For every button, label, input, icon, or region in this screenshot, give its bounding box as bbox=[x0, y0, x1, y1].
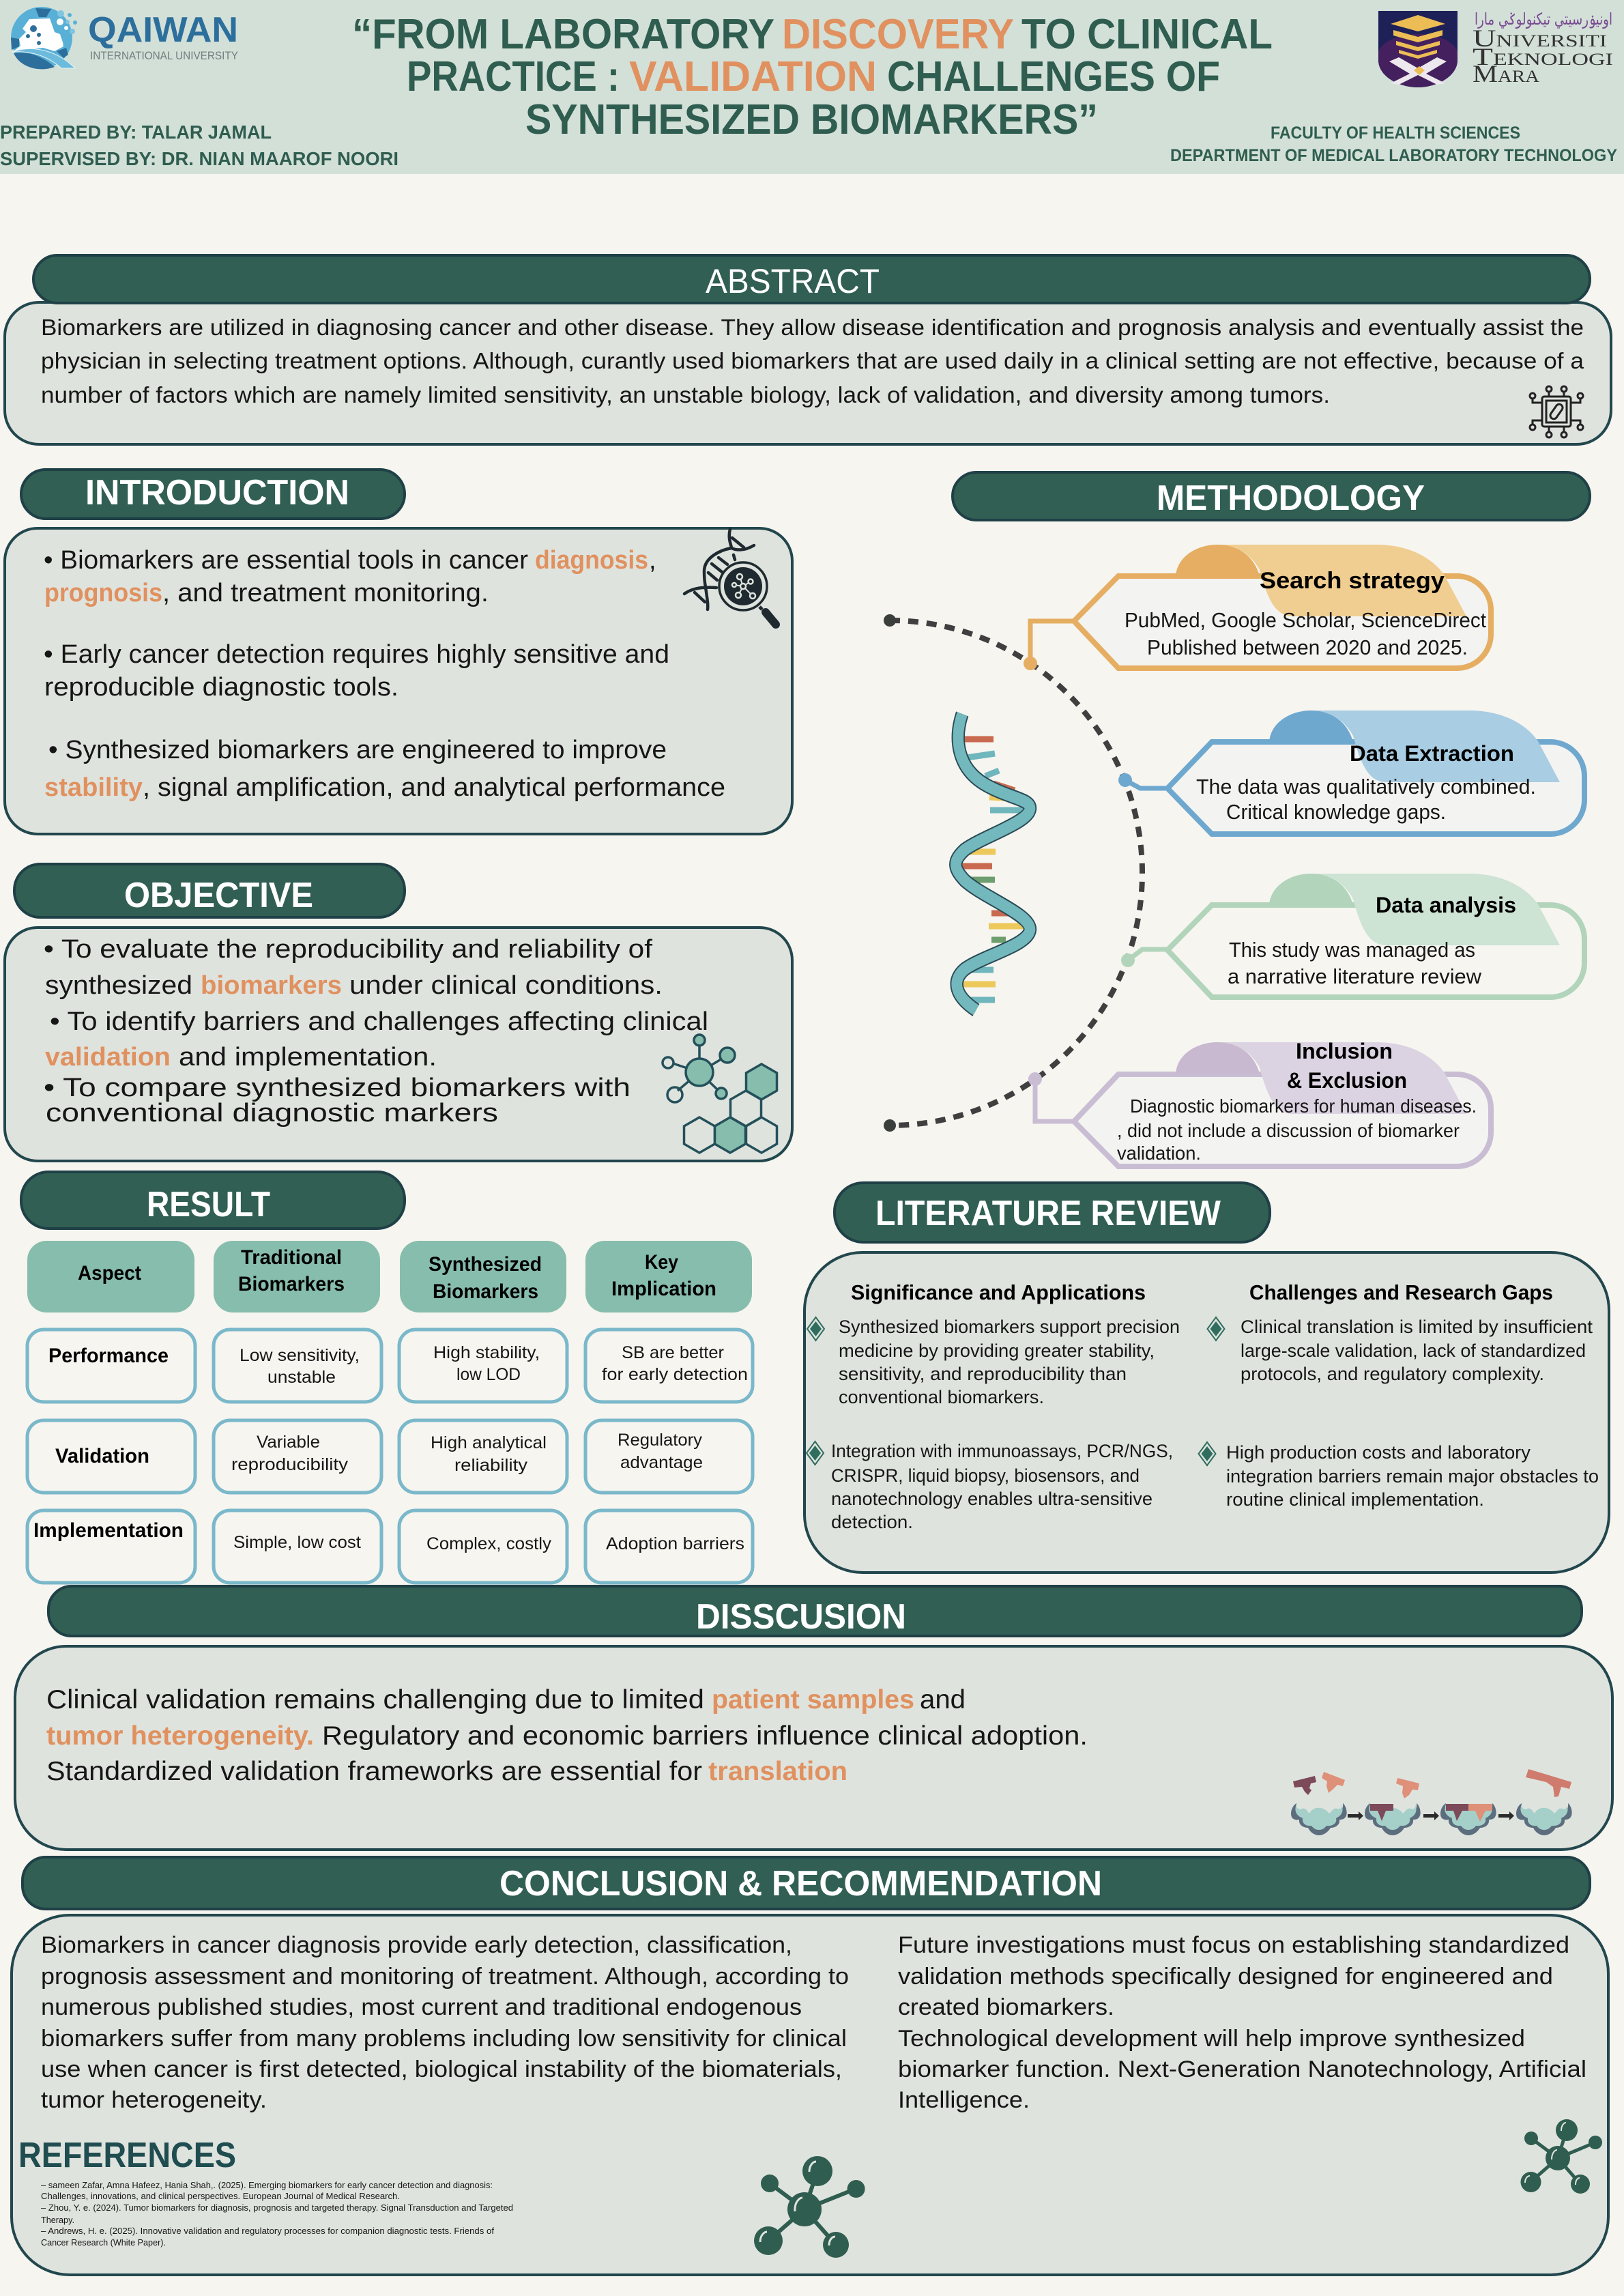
heading: result bbox=[21, 1172, 405, 1229]
table header row bbox=[27, 1241, 752, 1312]
row: performance: unstable bbox=[267, 1368, 336, 1387]
bullet: synthesized biomarkers: conventional biomarkers. bbox=[839, 1387, 1044, 1407]
row: validation: reproducibility bbox=[231, 1455, 349, 1474]
header band bbox=[0, 0, 1624, 174]
heading: abstract bbox=[33, 255, 1590, 303]
step: search strategy: Published between 2020 and 2025. bbox=[1147, 635, 1468, 659]
objective 2: • To identify barriers and challenges affecting clinical bbox=[50, 1007, 708, 1036]
bullet: synthesized biomarkers: sensitivity, and reproducibility than bbox=[839, 1364, 1127, 1384]
table header row: Synthesized bbox=[429, 1253, 542, 1276]
heading: conclusion and recommendation: CONCLUSION & RECOMMENDATION bbox=[499, 1864, 1102, 1904]
heading: references: REFERENCES bbox=[18, 2136, 236, 2175]
heading: literature review: LITERATURE REVIEW bbox=[875, 1194, 1221, 1233]
recommendation text bbox=[898, 1932, 1586, 2113]
table: result comparison bbox=[27, 1241, 753, 1583]
step: data extraction: Critical knowledge gaps. bbox=[1226, 800, 1446, 824]
step: search strategy bbox=[1024, 545, 1491, 670]
discussion text bbox=[46, 1685, 1088, 1786]
objective 2: and implementation. bbox=[179, 1043, 437, 1072]
recommendation text: Intelligence. bbox=[898, 2087, 1030, 2113]
objective 1: synthesized bbox=[45, 971, 192, 1000]
faculty and department: FACULTY OF HEALTH SCIENCES bbox=[1271, 124, 1520, 143]
icon: molecule and rings bbox=[663, 1035, 777, 1153]
step: data analysis bbox=[1121, 874, 1584, 997]
row: implementation bbox=[27, 1510, 753, 1583]
bullet: synthesized biomarkers: Synthesized biomarkers support precision bbox=[839, 1317, 1180, 1337]
heading: introduction: INTRODUCTION bbox=[85, 473, 349, 513]
discussion text: patient samples bbox=[712, 1685, 914, 1714]
abstract text: Biomarkers are utilized in diagnosing cancer and other disease. They allow disease identification and prognosis analysis and eventually assist the bbox=[41, 315, 1584, 340]
heading: methodology: METHODOLOGY bbox=[1157, 478, 1425, 518]
column: challenges and research gaps: Challenges and Research Gaps bbox=[1249, 1280, 1553, 1304]
discussion text: translation bbox=[708, 1757, 847, 1786]
row: validation: Variable bbox=[257, 1433, 320, 1452]
faculty and department bbox=[1170, 124, 1617, 165]
row: performance: Performance bbox=[48, 1345, 169, 1367]
row: validation: High analytical bbox=[431, 1433, 547, 1452]
recommendation text: Future investigations must focus on establishing standardized bbox=[898, 1932, 1569, 1958]
objective 1: • To evaluate the reproducibility and reliability of bbox=[44, 935, 652, 964]
conclusion text: prognosis assessment and monitoring of treatment. Although, according to bbox=[41, 1964, 849, 1990]
title: TO CLINICAL bbox=[1021, 11, 1273, 58]
panel: objective bbox=[5, 928, 792, 1161]
introduction bullet 1: , bbox=[649, 546, 656, 575]
introduction bullet 1: diagnosis bbox=[535, 546, 648, 575]
step: data extraction: Data Extraction bbox=[1350, 741, 1514, 766]
heading: result: RESULT bbox=[147, 1185, 270, 1224]
heading: objective: OBJECTIVE bbox=[124, 876, 313, 915]
introduction bullet 1: • Biomarkers are essential tools in cancer bbox=[44, 546, 528, 575]
recommendation text: biomarker function. Next-Generation Nanotechnology, Artificial bbox=[898, 2056, 1586, 2082]
table header row: Implication bbox=[611, 1278, 716, 1300]
introduction bullet 3: , signal amplification, and analytical performance bbox=[143, 773, 725, 802]
icon: small molecule bbox=[1520, 2119, 1602, 2194]
objective 1: biomarkers bbox=[201, 971, 342, 1000]
row: implementation: Implementation bbox=[33, 1519, 184, 1542]
bullet: clinical translation bbox=[1208, 1317, 1593, 1384]
abstract text: number of factors which are namely limited sensitivity, an unstable biology, lack of validation, and diversity among tumors. bbox=[41, 382, 1330, 407]
university name: Mara bbox=[1473, 60, 1539, 87]
panel: abstract bbox=[5, 255, 1611, 444]
abstract text bbox=[41, 315, 1584, 407]
row: performance bbox=[27, 1330, 753, 1402]
objective 3 bbox=[44, 1074, 630, 1128]
row: performance: High stability, bbox=[433, 1343, 540, 1362]
bullet: integration bbox=[807, 1441, 1173, 1532]
introduction bullet 1: , and treatment monitoring. bbox=[162, 579, 489, 607]
discussion text: and bbox=[920, 1685, 966, 1714]
step: data extraction: The data was qualitatively combined. bbox=[1196, 775, 1536, 799]
bullet: clinical translation: large-scale validation, lack of standardized bbox=[1241, 1340, 1586, 1361]
column: significance and applications bbox=[807, 1280, 1180, 1532]
row: validation: reliability bbox=[454, 1456, 528, 1475]
heading: literature review bbox=[835, 1183, 1270, 1242]
panel: discussion bbox=[15, 1646, 1612, 1850]
bullet: production costs bbox=[1198, 1442, 1599, 1510]
step: data analysis: Data analysis bbox=[1376, 893, 1516, 917]
recommendation text: created biomarkers. bbox=[898, 1994, 1114, 2020]
step: inclusion and exclusion bbox=[1028, 1039, 1491, 1166]
conclusion text: biomarkers suffer from many problems including low sensitivity for clinical bbox=[41, 2026, 847, 2052]
objective 2: validation bbox=[45, 1043, 171, 1072]
references list: Challenges, innovations, and clinical perspectives. European Journal of Medical Research. bbox=[41, 2191, 400, 2201]
references list: – Andrews, H. e. (2025). Innovative validation and regulatory processes for companion diagnostic tests. Friends of bbox=[41, 2226, 494, 2236]
discussion text: Clinical validation remains challenging due to limited bbox=[46, 1685, 704, 1714]
bullet: integration: Integration with immunoassays, PCR/NGS, bbox=[831, 1441, 1173, 1461]
conclusion text: Biomarkers in cancer diagnosis provide early detection, classification, bbox=[41, 1932, 792, 1958]
title: SYNTHESIZED BIOMARKERS” bbox=[525, 96, 1098, 143]
discussion text: Standardized validation frameworks are essential for bbox=[46, 1757, 702, 1786]
panel: introduction bbox=[5, 528, 792, 834]
conclusion text: numerous published studies, most current and traditional endogenous bbox=[41, 1994, 802, 2020]
step: search strategy: Search strategy bbox=[1260, 568, 1445, 594]
heading: introduction bbox=[21, 470, 405, 519]
recommendation text: validation methods specifically designed for engineered and bbox=[898, 1964, 1553, 1990]
objective 2 bbox=[45, 1007, 708, 1072]
table header row: Aspect bbox=[78, 1262, 141, 1285]
title: “FROM LABORATORY bbox=[352, 11, 774, 58]
heading: conclusion and recommendation bbox=[23, 1857, 1590, 1909]
icon: antibody binding sequence bbox=[1291, 1769, 1572, 1835]
references list: – Zhou, Y. e. (2024). Tumor biomarkers for diagnosis, prognosis and targeted therapy. Signal Transduction and Targeted bbox=[41, 2202, 513, 2213]
objective 3: • To compare synthesized biomarkers with bbox=[44, 1074, 630, 1102]
objective 3: conventional diagnostic markers bbox=[46, 1099, 498, 1128]
row: validation bbox=[27, 1420, 753, 1493]
bullet: production costs: High production costs and laboratory bbox=[1226, 1442, 1531, 1463]
table header row: Traditional bbox=[241, 1246, 342, 1269]
bullet: integration: nanotechnology enables ultra-sensitive bbox=[831, 1489, 1152, 1509]
introduction bullet 2: • Early cancer detection requires highly sensitive and bbox=[44, 640, 669, 669]
references list: – sameen Zafar, Amna Hafeez, Hania Shah,. (2025). Emerging biomarkers for early cancer detection and diagnosis: bbox=[41, 2180, 493, 2190]
bullet: integration: CRISPR, liquid biopsy, biosensors, and bbox=[831, 1465, 1140, 1486]
column: significance and applications: Significance and Applications bbox=[851, 1280, 1146, 1304]
dashed arc timeline bbox=[884, 614, 1142, 1132]
bullet: production costs: integration barriers remain major obstacles to bbox=[1226, 1466, 1599, 1487]
university name bbox=[1473, 25, 1613, 87]
heading: methodology bbox=[953, 472, 1590, 520]
step: data extraction bbox=[1118, 711, 1584, 834]
recommendation text: Technological development will help improve synthesized bbox=[898, 2026, 1525, 2052]
authors: SUPERVISED BY: DR. NIAN MAAROF NOORI bbox=[0, 148, 398, 169]
icon: large molecule bbox=[754, 2156, 865, 2258]
step: data analysis: This study was managed as bbox=[1229, 938, 1475, 962]
panel: conclusion bbox=[12, 1915, 1608, 2275]
authors: PREPARED BY: TALAR JAMAL bbox=[0, 121, 272, 143]
logo subtitle: INTERNATIONAL UNIVERSITY bbox=[90, 49, 238, 62]
title: PRACTICE : bbox=[407, 53, 620, 100]
heading: discussion: DISSCUSION bbox=[696, 1597, 906, 1637]
references list: Therapy. bbox=[41, 2215, 74, 2225]
title bbox=[352, 11, 1273, 143]
row: implementation: Simple, low cost bbox=[233, 1533, 361, 1552]
icon: chip bbox=[1530, 386, 1583, 437]
introduction bullet 3: stability bbox=[44, 773, 143, 802]
step: search strategy: PubMed, Google Scholar, ScienceDirect bbox=[1125, 608, 1486, 632]
step: inclusion and exclusion: Diagnostic biomarkers for human diseases. bbox=[1130, 1095, 1477, 1117]
objective 1: under clinical conditions. bbox=[349, 971, 663, 1000]
step: data analysis: a narrative literature review bbox=[1228, 964, 1482, 988]
bullet: clinical translation: Clinical translation is limited by insufficient bbox=[1241, 1317, 1593, 1337]
references list: Cancer Research (White Paper). bbox=[41, 2237, 166, 2248]
title: DISCOVERY bbox=[782, 11, 1014, 58]
panel: literature review bbox=[804, 1252, 1609, 1573]
introduction bullet 1 bbox=[44, 546, 656, 607]
introduction bullet 2: reproducible diagnostic tools. bbox=[44, 673, 398, 702]
step: inclusion and exclusion: validation. bbox=[1117, 1143, 1201, 1164]
bullet: integration: detection. bbox=[831, 1512, 913, 1532]
logo: Qaiwan International University bbox=[11, 7, 238, 69]
row: performance: Low sensitivity, bbox=[240, 1346, 360, 1365]
abstract text: physician in selecting treatment options. Although, curantly used biomarkers that are used daily in a clinical setting are not effective, because of a bbox=[41, 348, 1584, 373]
icon: DNA magnifier bbox=[684, 529, 776, 625]
heading: objective bbox=[14, 864, 405, 917]
bullet: clinical translation: protocols, and regulatory complexity. bbox=[1241, 1364, 1544, 1384]
conclusion text bbox=[41, 1932, 849, 2113]
title: CHALLENGES OF bbox=[887, 53, 1220, 100]
row: validation: advantage bbox=[620, 1453, 703, 1472]
table header row: Biomarkers bbox=[238, 1273, 345, 1295]
column: challenges and research gaps bbox=[1198, 1280, 1599, 1510]
step: inclusion and exclusion: & Exclusion bbox=[1287, 1068, 1407, 1093]
introduction bullet 2 bbox=[44, 640, 669, 702]
logo wordmark: QAIWAN bbox=[88, 10, 238, 50]
discussion text: tumor heterogeneity. bbox=[46, 1721, 314, 1751]
row: validation: Validation bbox=[55, 1445, 149, 1467]
university name: Universiti bbox=[1473, 25, 1607, 52]
row: performance: SB are better bbox=[622, 1343, 724, 1362]
authors bbox=[0, 121, 398, 169]
title: VALIDATION bbox=[629, 53, 877, 100]
table header row: Biomarkers bbox=[433, 1280, 538, 1303]
bullet: synthesized biomarkers: medicine by providing greater stability, bbox=[839, 1340, 1155, 1361]
conclusion text: tumor heterogeneity. bbox=[41, 2087, 267, 2113]
references list bbox=[41, 2180, 513, 2248]
discussion text: Regulatory and economic barriers influence clinical adoption. bbox=[322, 1721, 1088, 1751]
bullet: production costs: routine clinical implementation. bbox=[1226, 1489, 1484, 1510]
row: implementation: Adoption barriers bbox=[606, 1534, 744, 1553]
step: inclusion and exclusion: , did not include a discussion of biomarker bbox=[1117, 1120, 1460, 1141]
row: performance: low LOD bbox=[456, 1365, 521, 1384]
heading: discussion bbox=[48, 1586, 1582, 1637]
row: implementation: Complex, costly bbox=[426, 1534, 552, 1553]
introduction bullet 3 bbox=[44, 736, 725, 802]
table header row: Key bbox=[645, 1251, 678, 1274]
university name: Teknologi bbox=[1473, 43, 1613, 70]
row: performance: for early detection bbox=[602, 1365, 748, 1384]
introduction bullet 3: • Synthesized biomarkers are engineered to improve bbox=[48, 736, 667, 764]
conclusion text: use when cancer is first detected, biological instability of the biomaterials, bbox=[41, 2056, 842, 2082]
bullet: synthesized biomarkers bbox=[807, 1317, 1180, 1407]
row: validation: Regulatory bbox=[618, 1431, 703, 1450]
step: inclusion and exclusion: Inclusion bbox=[1296, 1039, 1393, 1063]
objective 1 bbox=[44, 935, 663, 1000]
illustration: DNA helix bbox=[956, 714, 1030, 1010]
logo: UiTM bbox=[1378, 10, 1613, 87]
introduction bullet 1: prognosis bbox=[44, 579, 162, 607]
heading: abstract: ABSTRACT bbox=[706, 262, 880, 300]
